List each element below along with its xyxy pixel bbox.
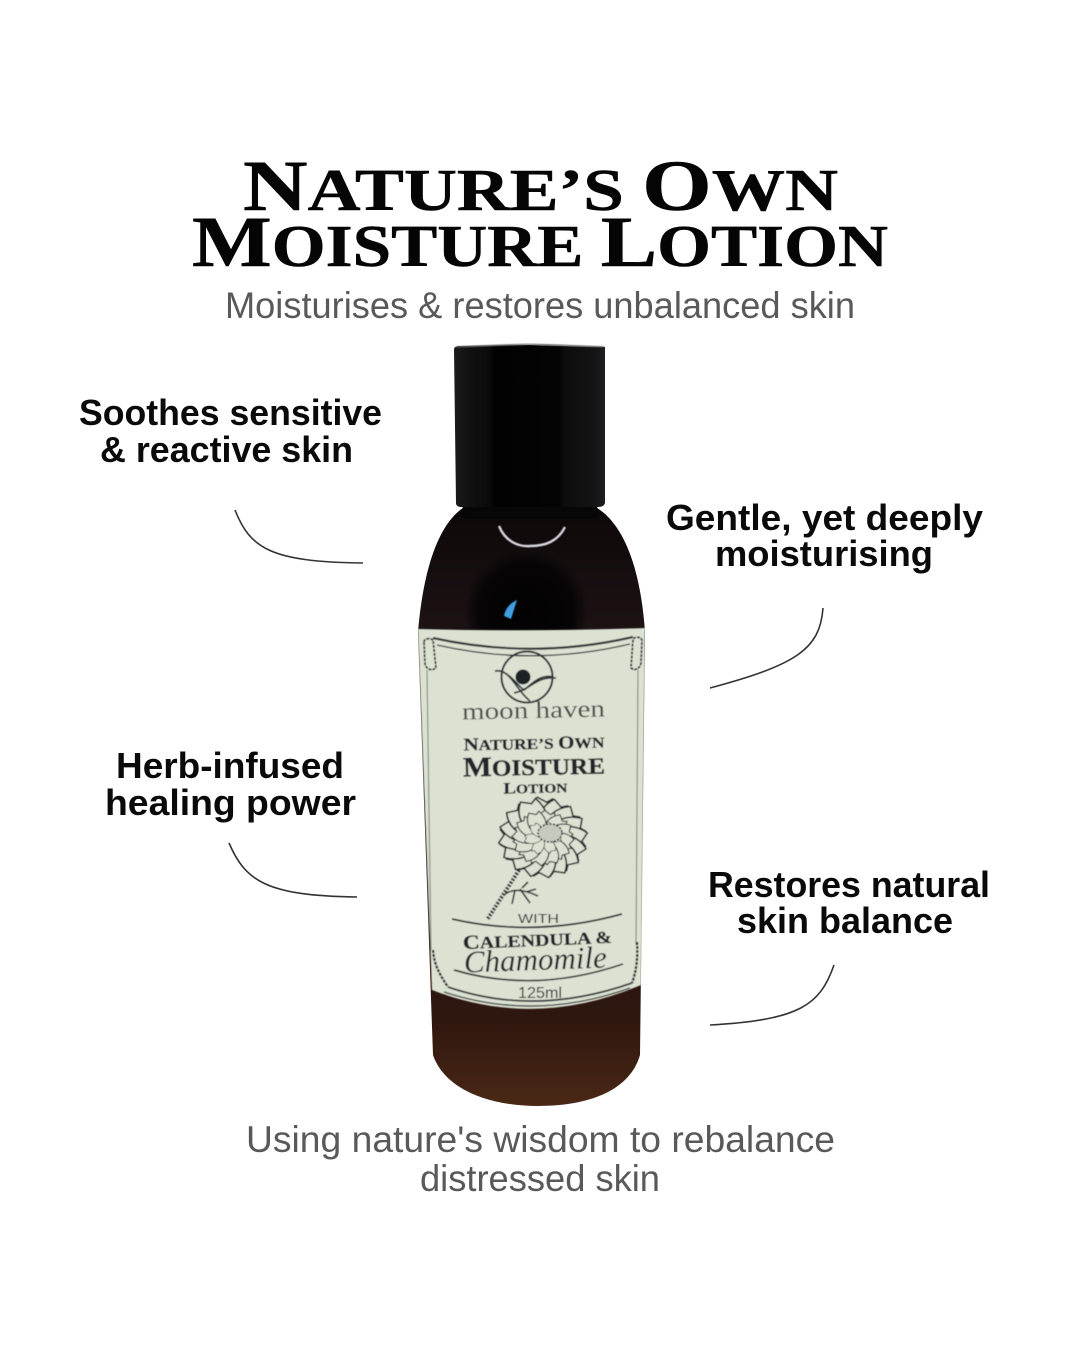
product name: MOISTURE: [463, 750, 605, 784]
brand name: moon haven: [462, 696, 605, 725]
callout: gentle yet deeply moisturising: Gentle, yet deeply: [666, 497, 983, 538]
with ingredients: [452, 911, 623, 1002]
title: [192, 146, 888, 282]
callout: herb-infused: Herb-infused: [116, 745, 344, 786]
callout: gentle yet deeply moisturising: moisturising: [715, 533, 933, 574]
bottle cap: [454, 345, 605, 507]
callout: herb-infused: healing power: [105, 782, 356, 823]
arrow: soothes sensitive: [235, 510, 363, 563]
bottle body: [418, 508, 645, 1106]
title: NATURE’S OWN: [243, 146, 838, 226]
callout: soothes sensitive: & reactive skin: [100, 429, 353, 470]
arrow: herb-infused: [229, 843, 357, 897]
neck collar: [462, 505, 598, 519]
product name: [462, 732, 606, 799]
arrow: gentle yet deeply moisturising: [710, 608, 823, 688]
highlight arc: [499, 526, 565, 546]
label frame: [424, 637, 642, 1006]
callout: gentle yet deeply moisturising: [666, 497, 983, 574]
label background: [418, 628, 645, 1009]
callout: restores natural balance: [708, 864, 990, 941]
closing statement: [246, 1119, 835, 1199]
product name: LOTION: [503, 779, 568, 798]
title: MOISTURE LOTION: [192, 202, 888, 282]
shoulder reflection: [464, 550, 588, 674]
blue glint: [504, 600, 517, 619]
callout: restores natural balance: skin balance: [737, 900, 953, 941]
callout: restores natural balance: Restores natural: [708, 864, 990, 905]
with ingredients: WITH: [518, 911, 559, 926]
callout: soothes sensitive: Soothes sensitive: [79, 392, 382, 433]
product label: [418, 628, 645, 1009]
closing statement: distressed skin: [420, 1158, 660, 1199]
callout: herb-infused: [105, 745, 356, 823]
with ingredients: 125ml: [518, 985, 562, 1002]
callout: soothes sensitive: [79, 392, 382, 470]
flower illustration: [487, 796, 589, 920]
with ingredients: CALENDULA &: [462, 926, 612, 954]
product name: NATURE’S OWN: [463, 732, 605, 754]
with ingredients: Chamomile: [463, 939, 608, 979]
product bottle: [418, 344, 645, 1106]
arrow: restores natural balance: [710, 965, 834, 1025]
moon haven logo: [495, 652, 556, 702]
subtitle: Moisturises & restores unbalanced skin: [225, 285, 855, 326]
closing statement: Using nature's wisdom to rebalance: [246, 1119, 835, 1160]
